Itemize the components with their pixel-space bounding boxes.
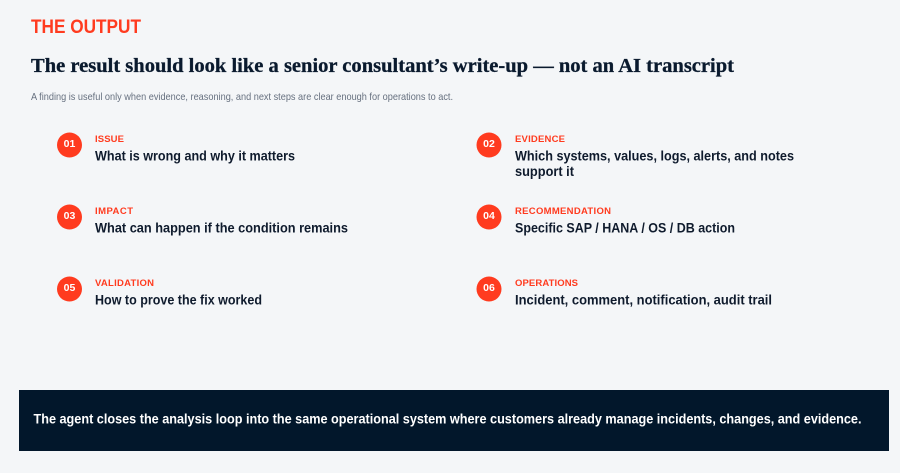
- badge 03: [57, 204, 82, 230]
- description: recommendation: Specific SAP / HANA / OS / DB action: [515, 220, 735, 236]
- headline: The result should look like a senior consultant’s write-up — not an AI transcript: [31, 55, 734, 77]
- callout banner: [19, 390, 889, 451]
- item 03: impact: [57, 204, 348, 236]
- label: evidence: EVIDENCE: [515, 134, 565, 145]
- label: recommendation: RECOMMENDATION: [515, 206, 611, 217]
- description: operations: Incident, comment, notification, audit trail: [515, 292, 772, 308]
- description: validation: How to prove the fix worked: [95, 292, 262, 308]
- badge 05: [57, 276, 82, 302]
- badge 04: [476, 204, 502, 230]
- description: issue: What is wrong and why it matters: [95, 148, 295, 164]
- badge 04: 04: [483, 210, 495, 222]
- item 01: issue: [57, 132, 295, 164]
- description: impact: What can happen if the condition remains: [95, 220, 348, 236]
- label: operations: OPERATIONS: [515, 278, 578, 289]
- label: impact: IMPACT: [95, 206, 133, 217]
- description: evidence: support it: [515, 163, 574, 179]
- badge 03: 03: [64, 210, 75, 222]
- badge 05: 05: [64, 282, 75, 294]
- badge 02: 02: [483, 138, 495, 150]
- description: evidence: [515, 148, 794, 179]
- item 05: validation: [57, 276, 262, 308]
- badge 06: [476, 276, 502, 302]
- item 04: recommendation: [476, 204, 735, 236]
- section label: THE OUTPUT: THE OUTPUT: [31, 17, 141, 38]
- description: evidence: Which systems, values, logs, alerts, and notes: [515, 148, 794, 164]
- subtitle: A finding is useful only when evidence, reasoning, and next steps are clear enough for operations to act.: [31, 91, 453, 103]
- label: issue: ISSUE: [95, 134, 124, 145]
- badge 06: 06: [483, 282, 495, 294]
- label: validation: VALIDATION: [95, 278, 154, 289]
- badge 01: [57, 132, 82, 158]
- item 06: operations: [476, 276, 772, 308]
- item 02: evidence: [476, 132, 794, 179]
- badge 02: [476, 132, 502, 158]
- badge 01: 01: [64, 138, 75, 150]
